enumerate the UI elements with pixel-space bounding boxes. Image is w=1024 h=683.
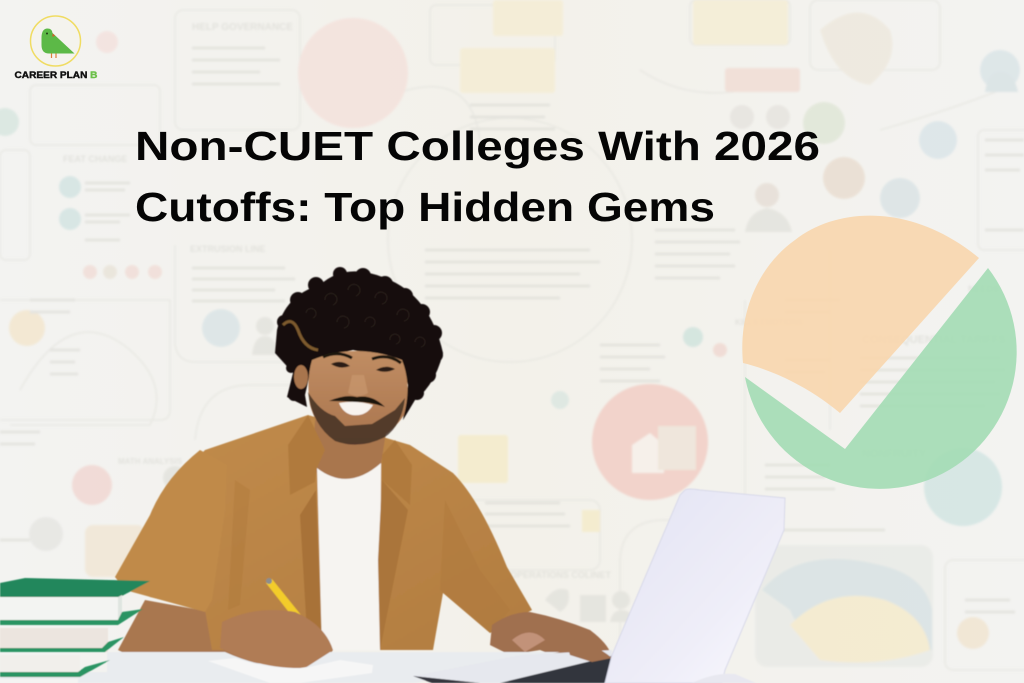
face: [308, 351, 408, 445]
checkmark logo: orange wedge and green tick: [742, 216, 1017, 489]
faded sticky notes: [85, 0, 800, 577]
brand logo: [14, 16, 98, 81]
faded headings: FEAT CHANGE: [63, 154, 127, 164]
moustache: [329, 396, 385, 407]
t-shirt: [317, 463, 381, 650]
orange wedge: [742, 216, 979, 413]
right collar and placket: [382, 440, 412, 505]
faded house circle: [592, 384, 708, 500]
left hand: [220, 610, 333, 668]
smile: [339, 402, 373, 415]
title: [135, 123, 820, 230]
beard: [308, 392, 405, 445]
hair highlight curl: [283, 321, 318, 350]
top book cover: [0, 578, 150, 597]
jacket torso: [115, 415, 532, 650]
right forearm and hand: [490, 612, 612, 662]
title line 1: Non-CUET Colleges With 2026: [135, 123, 820, 169]
green tick: [745, 268, 1017, 489]
faded headings: [63, 22, 1006, 580]
eyes: [331, 362, 395, 372]
left collar and placket: [288, 415, 325, 495]
faded headings: HELP GOVERNANCE: [192, 22, 293, 33]
keyboard: [500, 656, 612, 683]
third book: [0, 655, 80, 677]
faded headings: MATH ANALYSIS: [118, 457, 183, 466]
logo ring: [30, 16, 80, 66]
laptop corner: [692, 674, 756, 683]
faded headings: KILLS EMOTIONS: [735, 318, 804, 327]
faded headings: OPERATIONS COLINET: [510, 570, 611, 580]
right fingers: [565, 638, 612, 662]
hair: [275, 267, 443, 420]
logo wordmark: CAREER PLAN B: [14, 70, 98, 81]
bird icon: [42, 28, 74, 58]
nose: [348, 375, 368, 396]
jacket shading: [228, 480, 510, 633]
faded headings: NONFRUITY: [862, 448, 927, 460]
desk: [107, 652, 560, 683]
neck: [313, 420, 388, 490]
top book pages: [0, 597, 118, 625]
left forearm back skin: [118, 600, 335, 664]
faded people icons: [163, 12, 1018, 622]
faded headings: EXTRUSION LINE: [190, 244, 266, 254]
laptop base: [413, 650, 612, 683]
title line 2: Cutoffs: Top Hidden Gems: [135, 184, 715, 230]
second book: [0, 628, 108, 652]
faded headings: CONSEQUENTIAL TARIFFS: [862, 334, 1006, 346]
eyebrows: [323, 354, 401, 363]
student illustration: [0, 267, 785, 683]
ear: [294, 365, 308, 389]
notebook paper: [208, 658, 373, 683]
left sleeve: [115, 450, 227, 612]
hair curl texture: [306, 284, 425, 347]
faded headings: NEEDS: [968, 284, 999, 294]
books stack: [0, 578, 150, 683]
laptop lid: [605, 489, 785, 683]
faded landscape illustration: [755, 545, 933, 667]
pencil: [266, 578, 335, 661]
